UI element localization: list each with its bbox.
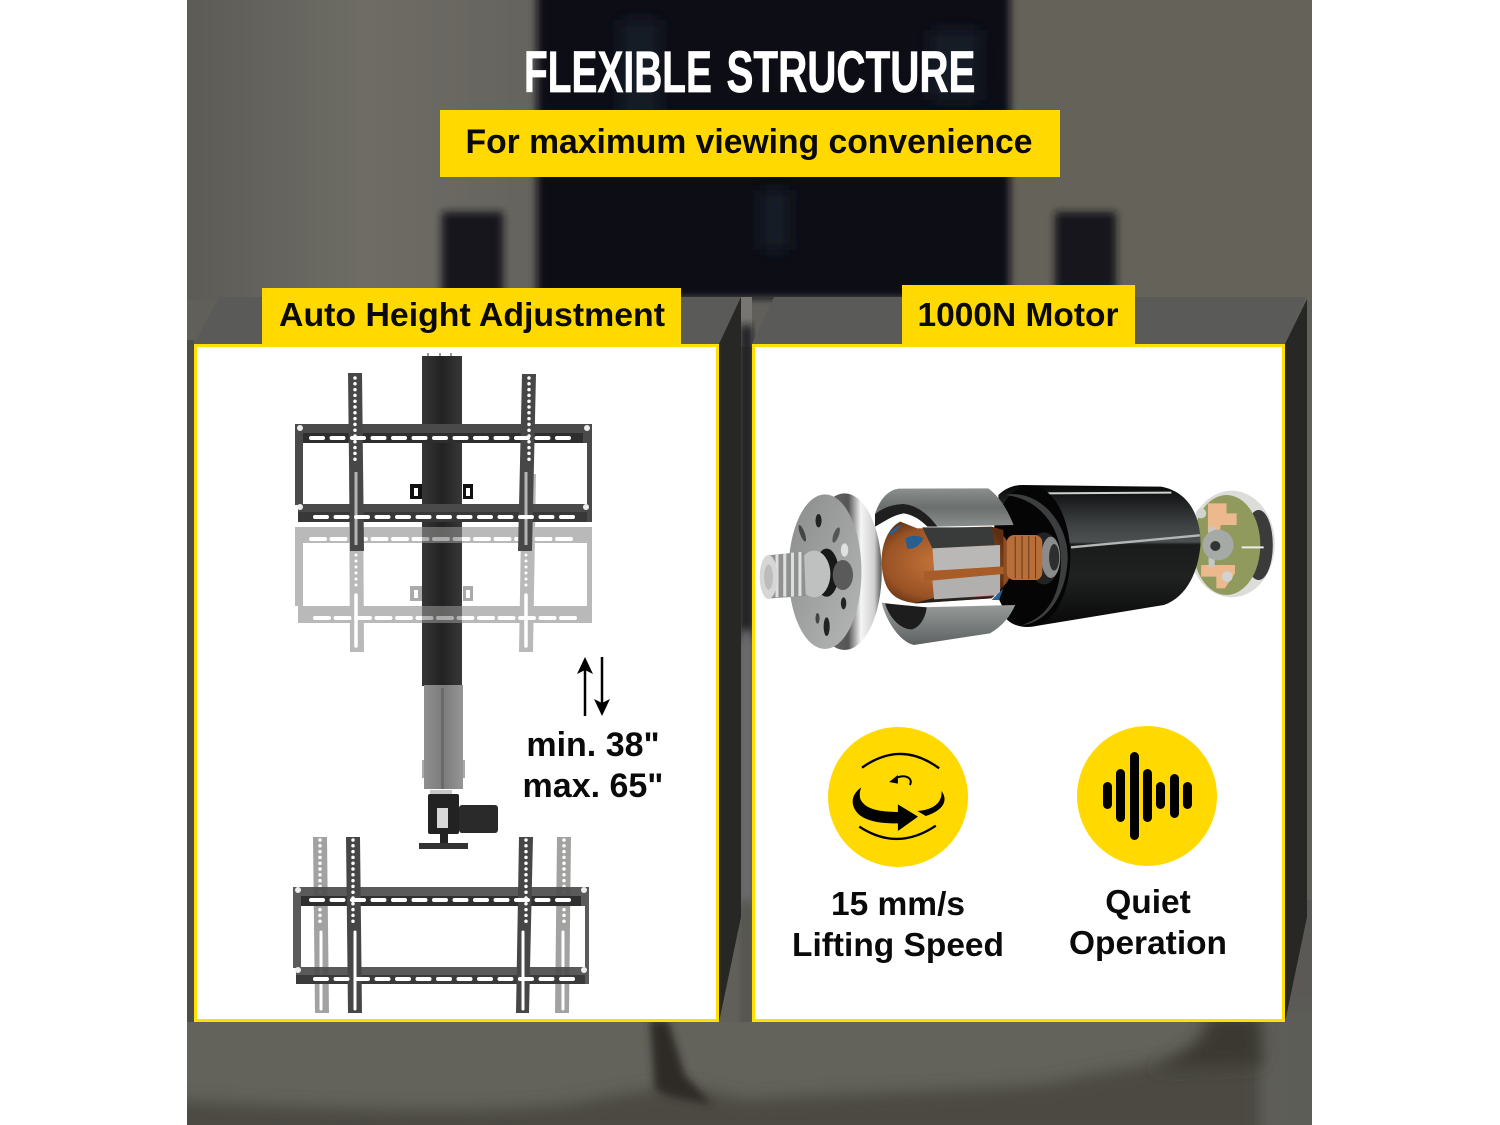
panel 3D side face <box>719 297 741 1022</box>
panel 3D top face <box>752 297 1306 344</box>
height range label <box>523 726 663 805</box>
label: lifting speed <box>792 886 1004 964</box>
title <box>524 40 976 105</box>
subtitle banner <box>440 110 1060 177</box>
lower TV bracket with ghost straps <box>293 837 589 1013</box>
arrows: up and down <box>577 657 610 716</box>
lift column <box>422 353 465 789</box>
bearing <box>1028 532 1060 584</box>
TV bracket: raised position <box>295 373 592 551</box>
motor housing and foot <box>419 790 498 849</box>
subtitle banner: For maximum viewing convenience <box>466 123 1032 161</box>
title: STRUCTURE <box>726 40 976 105</box>
panel heading tab: 1000N Motor <box>918 297 1118 334</box>
upper magnet segment <box>875 488 1014 527</box>
ghost TV bracket: lowered position <box>295 474 592 652</box>
copper rotor <box>882 522 1042 603</box>
icon: lifting speed rotation <box>828 727 968 867</box>
panel heading tab: Auto Height Adjustment <box>279 297 665 334</box>
height range label: min. 38" <box>526 726 660 764</box>
chrome flange disc and threaded shaft <box>760 493 882 650</box>
panel 3D side face <box>1285 299 1307 1022</box>
lower magnet segment <box>882 603 1015 645</box>
background photo: blurred living room <box>170 0 1330 1125</box>
panel body <box>196 346 718 1020</box>
panel: auto height adjustment <box>194 288 741 1022</box>
motor exploded view <box>760 485 1275 650</box>
panel heading tab <box>902 285 1135 346</box>
panel 3D top face <box>194 297 741 344</box>
title: FLEXIBLE <box>524 40 712 105</box>
label: lifting speed: Lifting Speed <box>792 927 1004 964</box>
height range label: max. 65" <box>523 767 663 805</box>
panel heading tab <box>262 288 681 346</box>
label: quiet operation <box>1069 884 1227 962</box>
label: quiet operation: Operation <box>1069 925 1227 962</box>
black motor can <box>991 485 1201 627</box>
label: quiet operation: Quiet <box>1105 884 1191 921</box>
icon: quiet sound wave <box>1077 726 1217 866</box>
label: lifting speed: 15 mm/s <box>831 886 965 923</box>
panel body <box>754 346 1284 1020</box>
panel: 1000N motor <box>752 285 1307 1022</box>
end cap with circuit board <box>1188 491 1275 597</box>
